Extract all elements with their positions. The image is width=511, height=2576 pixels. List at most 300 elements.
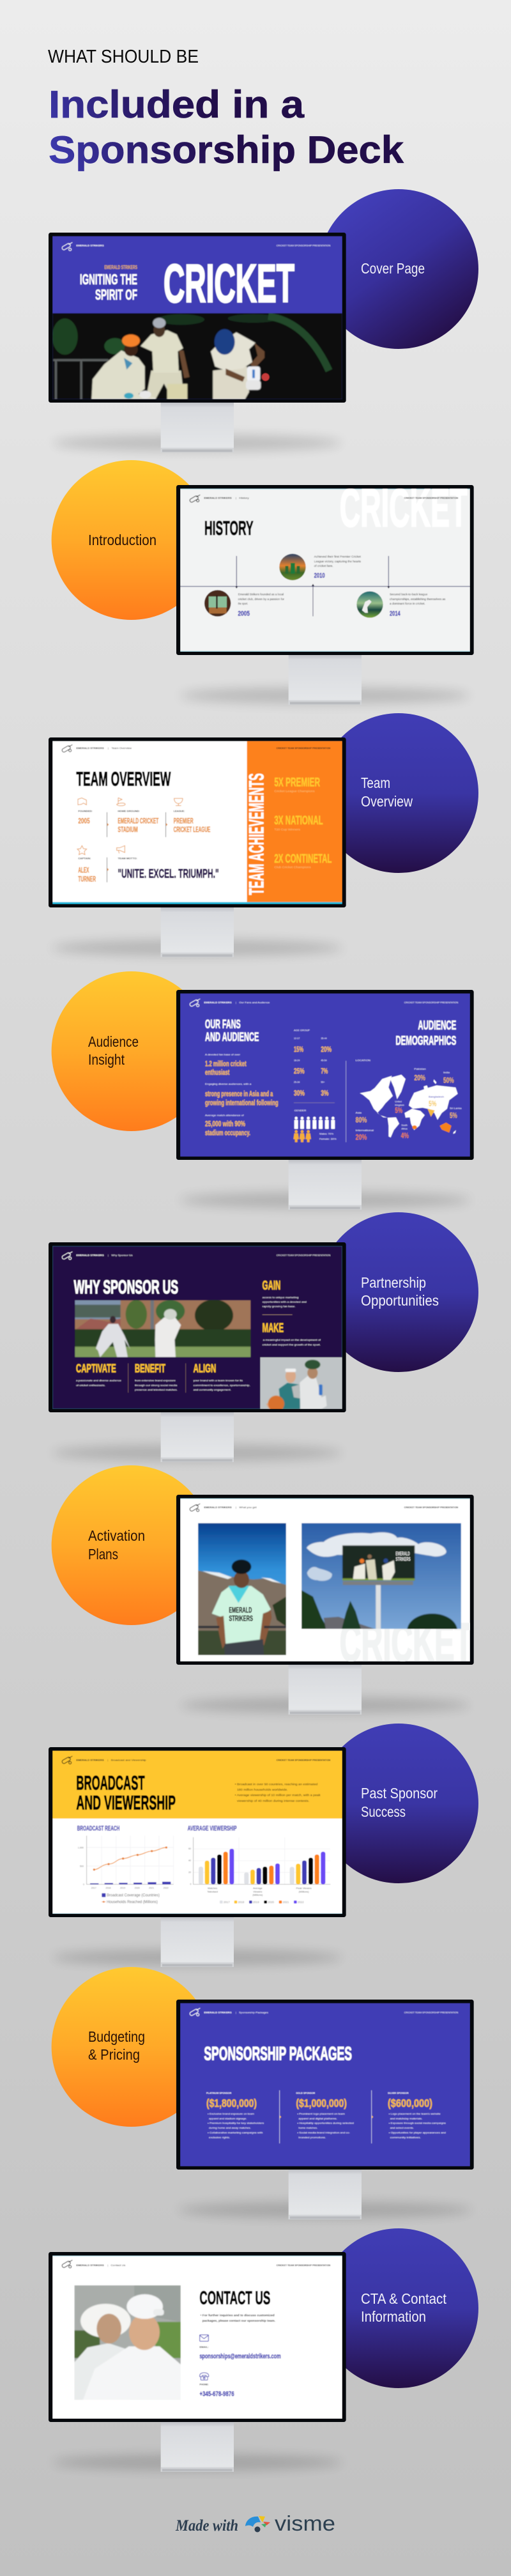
age group stats: 25% bbox=[294, 1067, 305, 1076]
slide: history bbox=[180, 477, 470, 652]
legend: average viewership: 2022 bbox=[298, 1901, 304, 1904]
monitor stand bbox=[161, 907, 234, 957]
label: partnership opportunities bbox=[361, 1274, 439, 1309]
milestone 2014: Secured back-to-back league bbox=[390, 593, 428, 596]
gender pictogram: Males: 70% bbox=[319, 1133, 334, 1136]
info labels: TEAM MOTTO: bbox=[118, 858, 137, 860]
package: platinum: • Collaborative marketing campaigns with bbox=[208, 2131, 263, 2134]
title: kicker: WHAT SHOULD BE bbox=[48, 47, 199, 67]
monitor shadow bbox=[178, 2202, 472, 2218]
heading bbox=[76, 1772, 176, 1814]
icon: phone bbox=[200, 2373, 209, 2380]
age group stats: 55+ bbox=[321, 1081, 325, 1084]
fan stats: A devoted fan base of over bbox=[205, 1053, 241, 1056]
monitor bezel bbox=[49, 1747, 346, 1917]
chart: average viewership bbox=[188, 1824, 330, 1904]
gain and make: MAKE bbox=[263, 1321, 284, 1335]
gender pictogram: GENDER bbox=[294, 1109, 307, 1112]
monitor: history slide bbox=[176, 477, 474, 705]
columns: captivate benefit align: presence and televised matches. bbox=[135, 1388, 178, 1391]
age group stats: 3% bbox=[321, 1088, 329, 1097]
legend: average viewership: 2020 bbox=[268, 1901, 275, 1904]
achievements: 5X PREMIER bbox=[274, 776, 320, 790]
age group stats: 15% bbox=[294, 1045, 303, 1054]
title: main heading bbox=[49, 83, 404, 171]
label: team overview bbox=[361, 775, 413, 810]
circle: introduction bbox=[52, 460, 211, 620]
package: platinum: • Premium hospitality for key stakeholders bbox=[208, 2122, 264, 2125]
slide: contact us bbox=[52, 2255, 342, 2419]
heading: fans and audience bbox=[205, 1018, 259, 1044]
fan stats: enthusiast bbox=[205, 1068, 229, 1077]
slide subtitle: IGNITING THE bbox=[80, 271, 137, 288]
monitor shadow bbox=[52, 2455, 342, 2471]
fan stats: 1.2 million cricket bbox=[205, 1059, 247, 1068]
icons bbox=[77, 798, 183, 854]
monitor bezel bbox=[49, 233, 346, 403]
photo: man in branded shirt bbox=[198, 1523, 286, 1655]
columns: captivate benefit align: BENEFIT bbox=[135, 1361, 165, 1375]
vertical title: team achievements: TEAM ACHIEVEMENTS bbox=[245, 773, 268, 895]
yellow header band bbox=[52, 1750, 342, 1819]
location stats: South bbox=[401, 1124, 408, 1127]
age group stats: 25-34 bbox=[294, 1081, 300, 1084]
columns: captivate benefit align: through our strong social media bbox=[135, 1384, 178, 1387]
monitor shadow bbox=[180, 1697, 469, 1713]
label: budgeting and pricing: & Pricing bbox=[88, 2046, 140, 2063]
monitor: packages slide bbox=[176, 2000, 474, 2219]
chart: average viewership: 40 bbox=[188, 1860, 191, 1862]
info values: STADIUM bbox=[118, 825, 138, 834]
achievements panel bbox=[247, 741, 342, 902]
package: gold: ($1,000,000) bbox=[296, 2097, 347, 2109]
chart: average viewership: 60 bbox=[188, 1847, 191, 1850]
monitor bezel bbox=[49, 1242, 346, 1412]
info labels: HOME GROUND: bbox=[118, 810, 140, 813]
monitor stand bbox=[289, 2170, 362, 2219]
heading: AND VIEWERSHIP bbox=[76, 1792, 176, 1814]
label: cover page: Cover Page bbox=[361, 260, 425, 277]
monitor bezel bbox=[176, 990, 474, 1160]
location stats: 50% bbox=[443, 1076, 454, 1084]
milestone 2005: cricket club, driven by a passion for bbox=[238, 598, 284, 601]
gain and make: rapidly growing fan base. bbox=[263, 1305, 296, 1308]
bars: peak viewers bbox=[290, 1852, 325, 1885]
logo bbox=[61, 242, 72, 251]
monitor: contact slide bbox=[49, 2252, 346, 2472]
package: platinum: apparel and stadium signage. bbox=[209, 2117, 247, 2120]
bars: average viewers bbox=[244, 1863, 280, 1885]
chart: broadcast reach: BROADCAST REACH bbox=[77, 1824, 119, 1832]
billboard text bbox=[395, 1551, 411, 1562]
age group stats: 18-24 bbox=[294, 1060, 300, 1062]
package: gold: • Social media brand integration and co- bbox=[297, 2131, 351, 2134]
chart: average viewership: Peak Viewers bbox=[296, 1886, 312, 1890]
header text: | bbox=[108, 1254, 109, 1257]
photo: cricketers bbox=[52, 313, 342, 399]
milestone 2014: a dominant force in cricket. bbox=[390, 602, 425, 605]
milestone 2005: the sport. bbox=[238, 602, 248, 605]
monitor stand bbox=[161, 1412, 234, 1462]
monitor stand bbox=[161, 403, 234, 452]
header text: EMERALD STRIKERS bbox=[76, 1254, 105, 1257]
bullet text: 180 million households worldwide. bbox=[237, 1788, 288, 1791]
location stats: Bangladesh bbox=[429, 1096, 444, 1099]
intro text bbox=[201, 2314, 275, 2322]
columns: captivate benefit align: and community engagement. bbox=[194, 1388, 231, 1391]
header text: CRICKET TEAM SPONSORSHIP PRESENTATION bbox=[277, 1759, 331, 1761]
monitor: broadcast slide bbox=[49, 1747, 346, 1967]
logo bbox=[61, 2260, 72, 2268]
monitor shadow bbox=[180, 1192, 469, 1208]
location stats: 4% bbox=[401, 1131, 409, 1140]
milestone 2010: of cricket fans. bbox=[314, 564, 333, 567]
chart: average viewership: Viewers bbox=[253, 1890, 262, 1893]
columns: captivate benefit align: from extensive brand exposure bbox=[135, 1379, 176, 1382]
package: platinum: ($1,800,000) bbox=[206, 2097, 257, 2109]
fan stats: Engaging diverse audiences, with a bbox=[205, 1082, 252, 1085]
visme logo mark bbox=[245, 2516, 270, 2532]
circle: cover page bbox=[319, 189, 478, 349]
location stats: India bbox=[443, 1072, 450, 1074]
slide subtitle: EMERALD STRIKERS bbox=[104, 265, 137, 270]
header text: History bbox=[239, 497, 249, 500]
milestone 2014: 2014 bbox=[390, 610, 400, 617]
bullet text: viewership of 40 million during intense contests. bbox=[237, 1799, 309, 1802]
gain and make: GAIN bbox=[263, 1279, 280, 1293]
header text: CRICKET TEAM SPONSORSHIP PRESENTATION bbox=[404, 1506, 459, 1509]
chart: average viewership: 20 bbox=[188, 1871, 191, 1874]
milestone 2010: 2010 bbox=[314, 572, 325, 580]
email contact: sponsorships@emeraldstrikers.com bbox=[199, 2353, 281, 2361]
logo bbox=[189, 1504, 200, 1512]
columns: captivate benefit align: your brand with a team known for its bbox=[194, 1379, 243, 1382]
package: silver: • Exposure through social media campaigns bbox=[389, 2122, 446, 2125]
legend: broadcast reach: Broadcast Coverage (Countries) bbox=[107, 1894, 160, 1898]
monitor bezel bbox=[176, 2000, 474, 2170]
visme wordmark: visme bbox=[275, 2511, 335, 2535]
circle: partnership opportunities bbox=[319, 1212, 478, 1372]
shirt text: EMERALD bbox=[229, 1605, 252, 1614]
circle: activation plans bbox=[52, 1465, 211, 1625]
label: CTA and contact information bbox=[361, 2290, 447, 2325]
location stats: Pakistan bbox=[414, 1068, 426, 1070]
package: silver: • Logo placement on the team's website bbox=[389, 2112, 441, 2115]
label: audience insight bbox=[88, 1033, 139, 1068]
chart: average viewership: Matches bbox=[208, 1886, 217, 1890]
header text: CRICKET TEAM SPONSORSHIP PRESENTATION bbox=[404, 2011, 459, 2014]
label: partnership opportunities: Partnership bbox=[361, 1274, 426, 1291]
icon: email bbox=[200, 2335, 208, 2341]
columns: captivate benefit align: of cricket enthusiasts. bbox=[76, 1384, 105, 1387]
age group stats: 12-17 bbox=[294, 1037, 300, 1040]
chart: average viewership: Televised bbox=[207, 1890, 218, 1893]
slide: why sponsor us bbox=[52, 1246, 342, 1412]
heading: BROADCAST bbox=[76, 1772, 145, 1794]
dividers bbox=[279, 2090, 373, 2143]
package: silver: • Opportunities for player appearances and bbox=[389, 2131, 446, 2134]
gain and make: cricket and support the growth of the sport. bbox=[263, 1343, 321, 1346]
header text: CRICKET TEAM SPONSORSHIP PRESENTATION bbox=[277, 747, 331, 750]
header text: EMERALD STRIKERS bbox=[76, 1759, 105, 1761]
info values: ALEX bbox=[78, 866, 89, 875]
phone contact: +345-678-9876 bbox=[199, 2390, 234, 2398]
header text: CRICKET TEAM SPONSORSHIP PRESENTATION bbox=[277, 2264, 331, 2267]
timeline bbox=[180, 556, 470, 616]
info values: CRICKET LEAGUE bbox=[174, 825, 210, 834]
location stats: United bbox=[395, 1100, 402, 1103]
slide subtitle bbox=[80, 265, 137, 303]
heading: HISTORY bbox=[204, 517, 254, 539]
monitor shadow bbox=[52, 1445, 342, 1461]
monitor bezel bbox=[49, 737, 346, 907]
heading: fans and audience: OUR FANS bbox=[205, 1018, 241, 1031]
age group stats: 7% bbox=[321, 1067, 328, 1076]
header text: CRICKET TEAM SPONSORSHIP PRESENTATION bbox=[404, 1001, 459, 1004]
label: activation plans: Activation bbox=[88, 1527, 145, 1544]
legend: average viewership: 2018 bbox=[238, 1901, 245, 1904]
circle: CTA and contact information bbox=[319, 2228, 478, 2388]
achievements: 3X NATIONAL bbox=[274, 814, 323, 828]
header text bbox=[204, 1001, 459, 1004]
info values: EMERALD CRICKET bbox=[118, 816, 159, 825]
label: past sponsor success bbox=[361, 1785, 438, 1820]
location stats: Sri Lanka bbox=[450, 1107, 462, 1110]
header text bbox=[76, 1759, 331, 1761]
monitor bezel bbox=[176, 1495, 474, 1665]
monitor shadow bbox=[52, 1950, 342, 1966]
monitor: team overview slide bbox=[49, 737, 346, 957]
package: platinum: during home and away matches. bbox=[209, 2126, 251, 2129]
team motto: "UNITE. EXCEL. TRIUMPH." bbox=[118, 867, 219, 881]
monitor bezel bbox=[176, 485, 474, 655]
photo: billboard bbox=[301, 1523, 461, 1647]
header text: CRICKET TEAM SPONSORSHIP PRESENTATION bbox=[277, 245, 331, 247]
monitor: activation slide bbox=[176, 1495, 474, 1715]
chart: broadcast reach: 2019 bbox=[120, 1886, 125, 1889]
info labels: CAPTAIN: bbox=[78, 858, 91, 860]
package: gold: home matches. bbox=[298, 2126, 317, 2129]
fan stats: growing international following bbox=[205, 1098, 278, 1107]
legend: broadcast reach: Households Reached (Millions) bbox=[107, 1901, 158, 1904]
milestone 2005 bbox=[204, 590, 284, 617]
package: gold: apparel and digital platforms. bbox=[298, 2117, 337, 2120]
bullet text bbox=[235, 1782, 321, 1802]
gain and make: opportunities with a devoted and bbox=[263, 1300, 307, 1304]
bullet text: • Broadcast in over 50 countries, reaching an estimated bbox=[235, 1782, 318, 1785]
age group stats bbox=[294, 1029, 332, 1097]
fan stats bbox=[205, 1053, 278, 1138]
made with text: Made with bbox=[175, 2517, 238, 2534]
header text: Sponsorship Packages bbox=[239, 2011, 268, 2014]
header text: EMERALD STRIKERS bbox=[76, 747, 105, 750]
label: audience insight: Insight bbox=[88, 1051, 125, 1068]
label: audience insight: Audience bbox=[88, 1033, 139, 1050]
package: silver: ($600,000) bbox=[388, 2097, 432, 2109]
label: introduction: Introduction bbox=[88, 532, 156, 548]
heading: fans and audience: AND AUDIENCE bbox=[205, 1031, 259, 1044]
gain and make bbox=[263, 1279, 321, 1346]
footer: made with visme bbox=[175, 2511, 335, 2535]
monitor: why sponsor slide bbox=[49, 1242, 346, 1462]
logo bbox=[189, 495, 200, 503]
header text: Contact Us bbox=[111, 2264, 126, 2267]
label: past sponsor success: Past Sponsor bbox=[361, 1785, 438, 1801]
label: budgeting and pricing bbox=[88, 2028, 145, 2063]
chart: broadcast reach: 2022 bbox=[164, 1886, 169, 1889]
gain and make: a meaningful impact on the development of bbox=[263, 1338, 321, 1341]
location stats: 5% bbox=[429, 1099, 437, 1108]
heading: SPONSORSHIP PACKAGES bbox=[204, 2043, 352, 2064]
phone contact bbox=[199, 2384, 234, 2398]
title: main heading: Sponsorship Deck bbox=[49, 128, 404, 171]
chart: broadcast reach: 2017 bbox=[91, 1886, 96, 1889]
package: gold: GOLD SPONSOR bbox=[296, 2091, 315, 2094]
gender pictogram: Female: 30% bbox=[319, 1138, 337, 1141]
columns: captivate benefit align bbox=[76, 1361, 250, 1392]
dividers bbox=[107, 812, 166, 883]
fan stats: strong presence in Asia and a bbox=[205, 1089, 273, 1098]
bars: matches televised bbox=[199, 1849, 234, 1885]
gain and make: access to unique marketing bbox=[263, 1295, 298, 1299]
header text bbox=[204, 1506, 459, 1509]
header text: EMERALD STRIKERS bbox=[76, 2264, 105, 2267]
header text: EMERALD STRIKERS bbox=[204, 2011, 233, 2014]
chart: broadcast reach: 2020 bbox=[135, 1886, 140, 1889]
label: CTA and contact information: Information bbox=[361, 2308, 426, 2325]
header text: Team Overview bbox=[111, 747, 132, 750]
logo bbox=[189, 999, 200, 1007]
age group stats: AGE GROUP bbox=[294, 1029, 310, 1031]
header text: | bbox=[107, 1759, 108, 1761]
shirt text bbox=[229, 1605, 253, 1623]
label: activation plans bbox=[88, 1527, 145, 1562]
phone contact: PHONE: bbox=[199, 2384, 209, 2386]
chart: average viewership: Average bbox=[253, 1886, 263, 1890]
legend: average viewership: 2019 bbox=[253, 1901, 259, 1904]
columns: captivate benefit align: CAPTIVATE bbox=[76, 1361, 116, 1375]
info values: TURNER bbox=[78, 874, 96, 883]
achievements: Club Cricket Champions bbox=[274, 866, 311, 869]
achievements bbox=[274, 776, 332, 869]
monitor: audience slide bbox=[176, 990, 474, 1210]
logo bbox=[189, 2008, 200, 2016]
intro text: • For further inquiries and to discuss customized bbox=[201, 2314, 275, 2317]
heading: demographics: DEMOGRAPHICS bbox=[395, 1034, 456, 1048]
billboard text: STRIKERS bbox=[395, 1556, 411, 1562]
header text: CRICKET TEAM SPONSORSHIP PRESENTATION bbox=[277, 1254, 331, 1257]
label: team overview: Overview bbox=[361, 793, 413, 810]
monitor: cover slide bbox=[49, 233, 346, 452]
columns: captivate benefit align: a passionate and diverse audience bbox=[76, 1379, 122, 1382]
columns: captivate benefit align: ALIGN bbox=[194, 1361, 216, 1375]
header text: CRICKET TEAM SPONSORSHIP PRESENTATION bbox=[404, 497, 459, 500]
bullet text: • Average viewership of 10 million per match, with a peak bbox=[235, 1793, 321, 1796]
header text bbox=[76, 1254, 331, 1257]
header text bbox=[76, 2264, 331, 2267]
monitor stand bbox=[289, 655, 362, 705]
chart: average viewership: (Millions) bbox=[252, 1893, 263, 1897]
circle: past sponsor success bbox=[319, 1724, 478, 1883]
title: main heading: Included in a bbox=[49, 83, 305, 126]
package: gold: • Hospitality opportunities during selected bbox=[297, 2122, 354, 2125]
slide: broadcast and viewership bbox=[52, 1750, 342, 1914]
logo bbox=[61, 1252, 72, 1260]
label: budgeting and pricing: Budgeting bbox=[88, 2028, 145, 2045]
label: activation plans: Plans bbox=[88, 1546, 118, 1562]
header text: EMERALD STRIKERS bbox=[204, 1506, 233, 1509]
age group stats: 45-54 bbox=[321, 1060, 327, 1062]
package: gold: branded promotions. bbox=[298, 2136, 326, 2139]
milestone 2014: championships, establishing themselves as bbox=[390, 598, 446, 601]
heading: CONTACT US bbox=[199, 2288, 270, 2309]
shirt text: STRIKERS bbox=[229, 1614, 253, 1623]
columns: captivate benefit align: commitment to excellence, sportsmanship, bbox=[194, 1384, 250, 1387]
milestone 2014 bbox=[356, 591, 446, 618]
chart: broadcast reach: 2018 bbox=[105, 1886, 111, 1889]
chart: broadcast reach: 500 bbox=[80, 1865, 84, 1867]
location stats: Asia bbox=[356, 1111, 362, 1114]
monitor shadow bbox=[52, 435, 342, 451]
monitor stand bbox=[289, 1160, 362, 1210]
milestone 2010: Achieved their first Premier Cricket bbox=[314, 555, 362, 558]
chart: average viewership: (Millions) bbox=[299, 1890, 309, 1893]
logo bbox=[61, 744, 72, 753]
monitor stand bbox=[161, 1917, 234, 1967]
slide: team overview bbox=[52, 741, 342, 904]
fan stats: stadium occupancy. bbox=[205, 1129, 250, 1138]
package: platinum bbox=[206, 2091, 264, 2139]
age group stats: 30% bbox=[294, 1088, 305, 1097]
location stats: Africa bbox=[401, 1127, 408, 1130]
header text: Broadcast and Viewership bbox=[111, 1759, 146, 1761]
location stats: 5% bbox=[395, 1106, 402, 1115]
legend: average viewership bbox=[220, 1901, 304, 1904]
heading: TEAM OVERVIEW bbox=[76, 767, 171, 790]
package: silver: and matchday materials. bbox=[390, 2117, 422, 2120]
milestone 2010: League victory, capturing the hearts bbox=[314, 560, 362, 563]
monitor shadow bbox=[180, 688, 469, 704]
slide: activation bbox=[180, 1498, 473, 1672]
achievements: 2X CONTINETAL bbox=[274, 852, 332, 866]
package: platinum: exclusive rights. bbox=[209, 2136, 230, 2139]
header text: EMERALD STRIKERS bbox=[76, 245, 105, 247]
location stats: 20% bbox=[356, 1133, 367, 1142]
package: silver: community initiatives. bbox=[390, 2136, 421, 2139]
header text: What you get bbox=[239, 1506, 257, 1509]
header text: | bbox=[108, 747, 109, 750]
legend: average viewership: 2017 bbox=[224, 1901, 230, 1904]
slide: audience bbox=[180, 993, 470, 1157]
package: silver: and select events. bbox=[390, 2126, 414, 2129]
monitor shadow bbox=[52, 940, 342, 956]
header text bbox=[76, 245, 331, 247]
header text bbox=[76, 747, 331, 750]
label: team overview: Team bbox=[361, 775, 390, 791]
location stats: 80% bbox=[356, 1116, 367, 1125]
milestone 2005: Emerald Strikers founded as a local bbox=[238, 593, 284, 596]
monitor bezel bbox=[49, 2252, 346, 2422]
chart: average viewership: AVERAGE VIEWERSHIP bbox=[188, 1824, 237, 1832]
photo: two cricketers bbox=[74, 2285, 181, 2400]
slide: sponsorship packages bbox=[180, 2003, 470, 2166]
achievements: Cricket League Champions bbox=[274, 790, 315, 793]
header text bbox=[204, 2011, 459, 2014]
legend: broadcast reach bbox=[102, 1893, 160, 1904]
header text: | bbox=[107, 2264, 108, 2267]
monitor stand bbox=[289, 1665, 362, 1715]
location stats bbox=[356, 1068, 462, 1142]
